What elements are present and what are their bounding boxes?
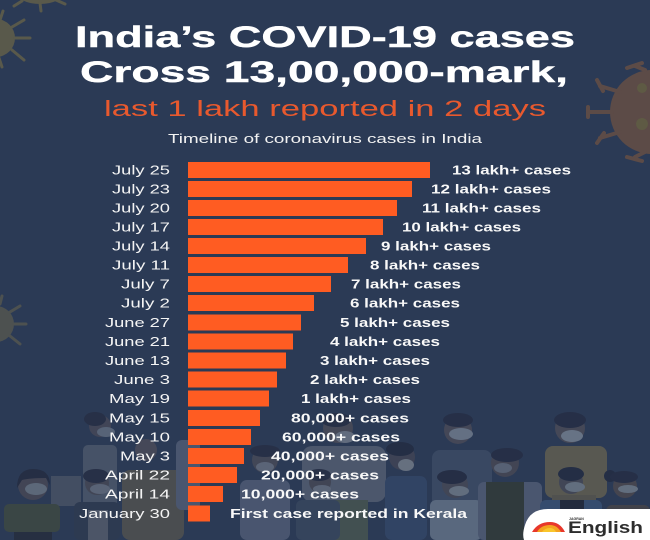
person: child	[296, 469, 340, 540]
logo wordmark: JAGRAN	[569, 517, 584, 521]
date labels: July 2	[121, 296, 170, 310]
value labels: 6 lakh+ cases	[350, 296, 460, 310]
bar chart	[79, 162, 571, 522]
date labels: June 27	[105, 315, 170, 330]
date labels: May 19	[109, 391, 170, 406]
date labels: January 30	[79, 506, 170, 521]
person: boy grey shirt	[430, 470, 482, 540]
icon: virus right	[588, 63, 650, 161]
value labels: 5 lakh+ cases	[340, 315, 450, 330]
value labels: 20,000+ cases	[261, 468, 379, 482]
bars	[188, 162, 430, 522]
title: India’s COVID-19 cases	[75, 21, 575, 54]
logo wordmark: English	[568, 518, 643, 537]
date labels: May 10	[109, 430, 170, 444]
value labels: 11 lakh+ cases	[422, 200, 541, 216]
person: nurse	[83, 412, 117, 540]
date labels: June 13	[105, 353, 170, 368]
person: boy blue jacket	[540, 467, 602, 540]
date labels: June 21	[105, 334, 170, 349]
value labels: 7 lakh+ cases	[351, 276, 461, 292]
date labels: July 7	[121, 276, 170, 292]
icon: virus top left	[0, 11, 30, 67]
date labels: May 3	[120, 448, 170, 464]
value labels: 10 lakh+ cases	[402, 220, 521, 234]
title: Cross 13,00,000-mark,	[80, 56, 568, 89]
value labels	[230, 162, 571, 521]
person: yellow dress	[122, 439, 184, 540]
value labels: 40,000+ cases	[271, 448, 389, 464]
person: with bag	[240, 445, 290, 540]
title	[75, 21, 575, 89]
icon: rising sun	[532, 522, 565, 532]
value labels: 10,000+ cases	[241, 486, 359, 502]
icon: virus lower left	[0, 296, 26, 344]
person: dark vest woman	[478, 448, 542, 540]
date labels: July 11	[112, 258, 170, 272]
date labels: July 23	[112, 182, 170, 196]
value labels: 1 lakh+ cases	[301, 391, 411, 406]
subtitle: last 1 lakh reported in 2 days	[104, 96, 546, 121]
value labels: 4 lakh+ cases	[330, 334, 440, 349]
date labels: April 14	[105, 486, 170, 502]
box	[51, 476, 81, 506]
logo: Jagran English	[523, 509, 650, 540]
value labels: 9 lakh+ cases	[381, 238, 491, 254]
icon: virus top center-left	[14, 0, 65, 11]
value labels: First case reported in Kerala	[230, 506, 468, 521]
person: yellow shirt	[545, 412, 607, 515]
value labels: 13 lakh+ cases	[452, 162, 571, 178]
person: light shirt	[176, 440, 200, 510]
value labels: 3 lakh+ cases	[320, 353, 430, 368]
person: boy	[74, 469, 120, 540]
date labels: May 15	[109, 410, 170, 426]
person: blue sweater	[385, 442, 427, 540]
value labels: 8 lakh+ cases	[370, 258, 480, 272]
person: tall man	[432, 413, 492, 510]
date labels: April 22	[105, 468, 170, 482]
value labels: 2 lakh+ cases	[310, 372, 420, 387]
person: center tall	[302, 413, 386, 540]
people illustration	[4, 412, 650, 540]
value labels: 60,000+ cases	[282, 430, 400, 444]
date labels	[79, 162, 170, 521]
date labels: June 3	[114, 372, 170, 387]
date labels: July 25	[112, 162, 170, 178]
chart caption: Timeline of coronavirus cases in India	[168, 131, 483, 146]
value labels: 80,000+ cases	[291, 410, 409, 426]
person: girl with bun	[604, 470, 650, 540]
date labels: July 17	[112, 220, 170, 234]
person: left woman	[4, 469, 60, 540]
value labels: 12 lakh+ cases	[431, 182, 551, 196]
date labels: July 14	[112, 238, 170, 254]
date labels: July 20	[112, 200, 170, 216]
